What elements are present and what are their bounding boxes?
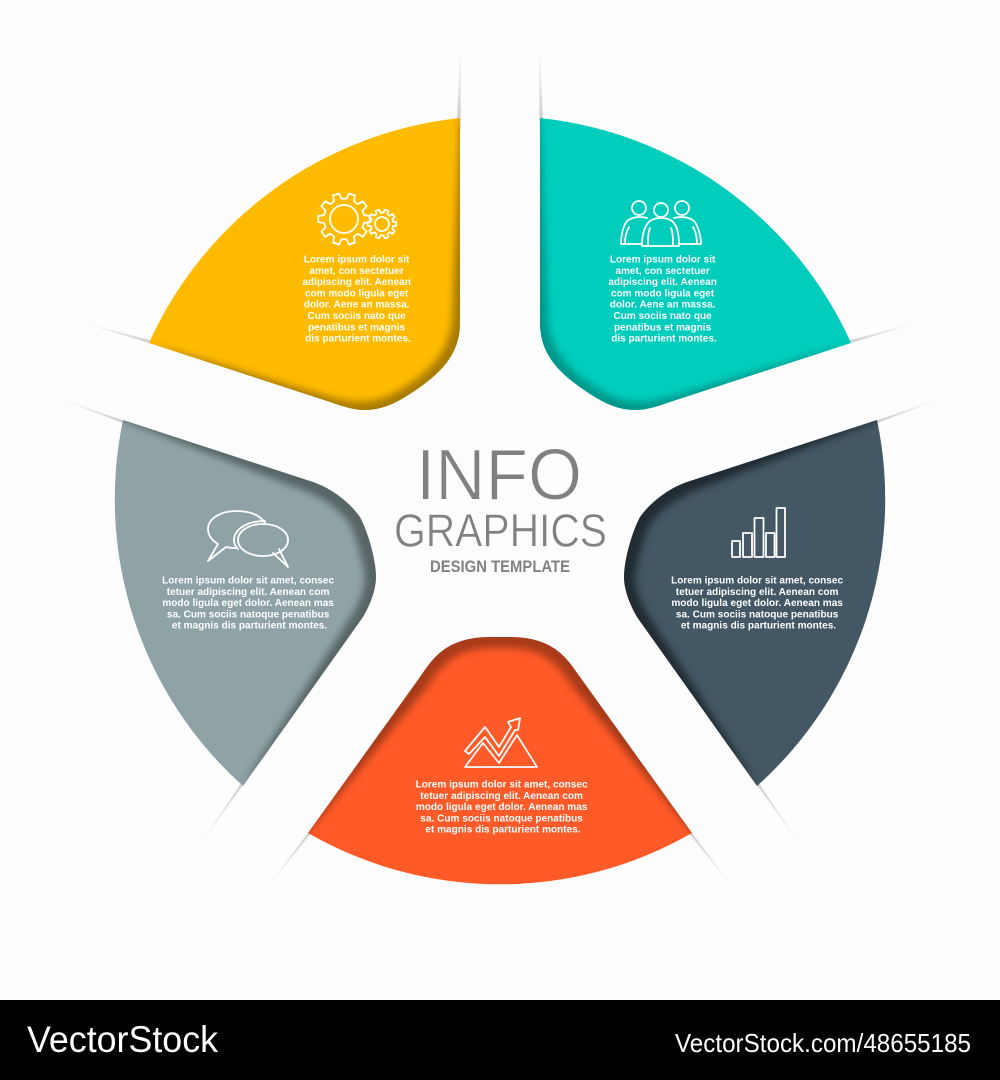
yellow text block: amet, con sectetuer [309,266,404,277]
orange text block: tetuer adipiscing elit. Aenean com [420,791,583,802]
yellow text block: com modo ligula eget [305,288,409,299]
slate text block: et magnis dis parturient montes. [681,621,836,632]
grey text block: Lorem ipsum dolor sit amet, consec [162,576,334,586]
grey text block: et magnis dis parturient montes. [172,621,327,632]
grey text block: modo ligula eget dolor. Aenean mas [162,598,334,609]
slate text block: sa. Cum sociis natoque penatibus [676,609,839,620]
teal text block: penatibus et magnis [614,322,712,333]
icon: bar chart [732,508,785,557]
teal text block: dis parturient montes. [611,334,717,345]
teal text block: com modo ligula eget [611,288,715,299]
slate text block: Lorem ipsum dolor sit amet, consec [671,576,843,586]
slate text block: tetuer adipiscing elit. Aenean com [676,587,838,598]
teal text block: Cum sociis nato que [613,311,712,322]
teal text block: adipiscing elit. Aenean [608,277,717,288]
grey text block: tetuer adipiscing elit. Aenean com [167,587,329,598]
slate wedge shape [624,420,885,786]
teal text block: amet, con sectetuer [615,266,710,277]
panel: dark slate segment [624,420,886,786]
orange text block: Lorem ipsum dolor sit amet, consec [416,780,588,790]
grey text block: sa. Cum sociis natoque penatibus [167,609,330,620]
subheading: design template: DESIGN TEMPLATE [430,557,570,576]
orange text block: et magnis dis parturient montes. [425,825,581,836]
heading: GRAPHICS: GRAPHICS [394,504,607,556]
yellow text block: Lorem ipsum dolor sit [304,254,410,266]
yellow text block: Cum sociis nato que [307,311,406,322]
yellow text block: penatibus et magnis [308,322,406,333]
grey wedge shape [115,420,376,786]
yellow wedge inner shadow [149,118,470,420]
yellow text block: dis parturient montes. [305,334,411,345]
heading: INFO: INFO [416,436,582,516]
orange wedge shape [308,637,692,884]
yellow text block: dolor. Aene an massa. [304,300,410,311]
teal text block: dolor. Aene an massa. [610,300,716,311]
icon: people [621,201,701,246]
panel: teal segment [530,118,851,420]
panel: grey segment [114,420,376,786]
teal wedge shape [540,118,851,410]
icon: mountains with rising arrow [465,718,537,767]
orange text block: modo ligula eget dolor. Aenean mas [416,802,588,813]
teal text block: Lorem ipsum dolor sit [610,254,716,266]
panel: yellow segment [149,118,470,420]
slate text block: modo ligula eget dolor. Aenean mas [671,598,843,609]
yellow text block: adipiscing elit. Aenean [302,277,411,288]
teal wedge inner shadow [540,118,838,410]
panel: orange segment [308,637,692,884]
grey wedge inner shadow [122,420,376,780]
footer bar [0,1000,1000,1080]
footer image id: VectorStock.com/48655185 [675,1028,971,1058]
yellow wedge shape [149,118,460,410]
orange wedge inner shadow [308,637,692,834]
central title [394,436,607,576]
footer logo text: VectorStock [27,1019,218,1060]
orange text block: sa. Cum sociis natoque penatibus [420,813,583,824]
icon: gears [318,194,396,244]
star arm edge slivers [55,40,945,890]
icon: speech bubbles [208,511,288,567]
slate wedge inner shadow [624,420,878,778]
